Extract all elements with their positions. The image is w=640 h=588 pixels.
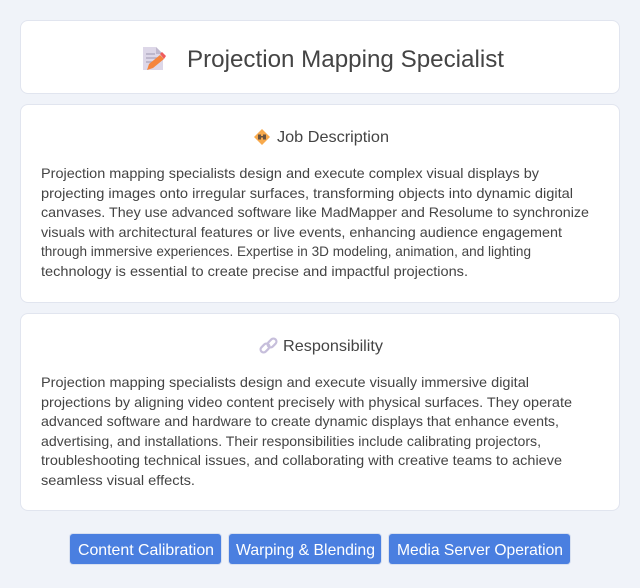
icon: document with pencil — [143, 47, 166, 70]
text: responsibility body: advertising, and installations. Their responsibilities include calibrating projectors, — [41, 433, 541, 449]
text: responsibility body: troubleshooting technical issues, and collaborating with creative teams to achieve — [41, 452, 562, 468]
text: responsibility body: Projection mapping specialists design and execute visually immersive digital — [41, 374, 529, 390]
heading: responsibility: Responsibility — [283, 338, 383, 355]
icon: job description diamond — [254, 129, 270, 145]
text: job description body: visuals with architectural features or live events, enhancing audience engagement — [41, 224, 562, 240]
panel: title — [20, 20, 620, 94]
text: job description body: canvases. They use advanced software like MadMapper and Resolume to synchronize — [41, 204, 589, 220]
title: Projection Mapping Specialist — [187, 46, 504, 73]
tag: media server operation: Media Server Operation — [397, 542, 563, 559]
tag: warping and blending: Warping & Blending — [236, 542, 375, 559]
text: responsibility body: seamless visual effects. — [41, 472, 195, 488]
tag: content calibration — [70, 534, 221, 564]
text: job description body: Projection mapping specialists design and execute complex visual displays by — [41, 165, 539, 181]
text: responsibility body: projections by aligning video content precisely with physical surfaces. They operate — [41, 394, 572, 410]
text: job description body: projecting images onto irregular surfaces, transforming objects into dynamic digital — [41, 185, 573, 201]
text: job description body: through immersive experiences. Expertise in 3D modeling, animation, and lighting — [41, 243, 531, 259]
panel: job description — [20, 104, 620, 303]
tag: warping and blending — [229, 534, 381, 564]
text: job description body — [41, 165, 589, 279]
tag: media server operation — [389, 534, 570, 564]
text: responsibility body: advanced software and hardware to create dynamic displays that enhance events, — [41, 413, 559, 429]
icon: responsibility link — [260, 338, 278, 354]
heading: job description: Job Description — [277, 129, 389, 146]
tag: content calibration: Content Calibration — [78, 542, 214, 559]
panel: responsibility — [20, 313, 620, 511]
text: job description body: technology is essential to create precise and impactful projections. — [41, 263, 468, 279]
